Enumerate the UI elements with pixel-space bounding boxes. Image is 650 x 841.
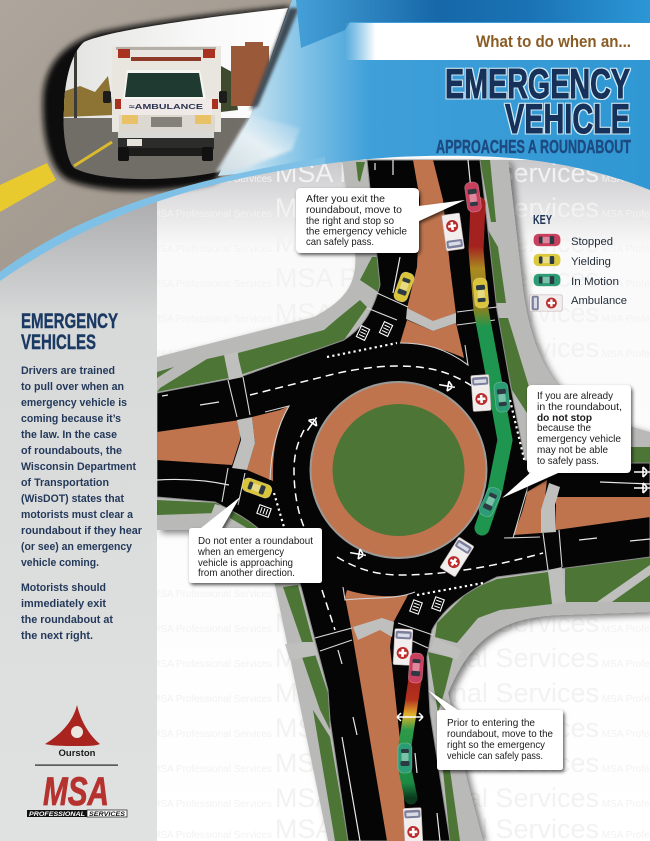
roundabout map xyxy=(157,160,650,841)
car: stopped north xyxy=(464,181,482,213)
sidebar heading: VEHICLES xyxy=(21,330,96,354)
key: ambulance: Ambulance xyxy=(571,295,627,307)
sidebar body text: of roundabouts, the xyxy=(21,445,122,457)
callout: if you are already: emergency vehicle xyxy=(537,433,621,445)
yield arrows south xyxy=(397,713,423,721)
sidebar body text: motorists must clear a xyxy=(21,509,134,521)
car: yielding north xyxy=(473,277,489,309)
sidebar body text: (WisDOT) states that xyxy=(21,493,124,505)
mirror reflection xyxy=(64,8,288,180)
ambulance: roundabout east xyxy=(471,374,491,412)
car: in motion south xyxy=(398,743,412,773)
sidebar heading xyxy=(21,309,118,354)
sidebar body text: emergency vehicle is xyxy=(21,397,127,409)
header photo: road surface xyxy=(0,0,300,272)
reflected yellow line xyxy=(74,142,112,166)
vehicle path: south approach xyxy=(405,672,416,798)
callout: if you are already xyxy=(502,385,631,498)
logo: MSA Professional Services: SERVICES xyxy=(89,812,125,818)
sidebar body text: to pull over when an xyxy=(21,381,124,393)
logo: Ourston: Ourston xyxy=(59,748,96,759)
callout: do not enter: from another direction. xyxy=(198,567,295,579)
callout: after you exit: can safely pass. xyxy=(306,236,374,248)
key: stopped: Stopped xyxy=(571,236,613,248)
sidewalk footprint xyxy=(157,160,650,841)
sidebar body text: immediately exit xyxy=(21,598,106,610)
car: in motion lower xyxy=(478,487,502,517)
key legend xyxy=(530,213,627,311)
key: in motion: In Motion xyxy=(571,276,619,288)
reflected road xyxy=(64,118,250,180)
callout: do not enter: when an emergency xyxy=(197,546,285,558)
callout: do not enter: Do not enter a roundabout xyxy=(198,535,313,547)
MSA wordmark: MSA xyxy=(43,770,109,814)
logo: Ourston xyxy=(45,705,100,759)
callout: do not enter xyxy=(189,497,322,583)
professional services bar xyxy=(27,810,87,817)
sidebar body text: of Transportation xyxy=(21,477,109,489)
sidebar body text: coming because it’s xyxy=(21,413,121,425)
logo: MSA Professional Services xyxy=(27,770,127,818)
road arrows and bike markings xyxy=(257,322,650,614)
splitter island: west xyxy=(157,406,289,481)
vehicle path: north approach xyxy=(476,204,505,528)
callout: if you are already: do not stop xyxy=(537,412,592,424)
callout: prior to entering xyxy=(428,690,563,770)
sidebar body text: Wisconsin Department xyxy=(21,461,136,473)
ambulance: south lower xyxy=(403,808,423,841)
asphalt roads xyxy=(157,160,650,841)
callout: if you are already: because the xyxy=(537,422,591,434)
sidebar body text: (or see) an emergency xyxy=(21,541,133,553)
callout: prior to entering: roundabout, move to the xyxy=(447,728,553,740)
callout: if you are already: may not be able xyxy=(537,444,608,456)
splitter island: north xyxy=(400,160,464,358)
ambulance: north xyxy=(442,213,464,251)
lamp post xyxy=(74,48,77,118)
watermark pattern xyxy=(152,158,650,841)
header: window frame xyxy=(250,8,299,110)
ambulance: roundabout south xyxy=(440,537,474,577)
splitter island: south xyxy=(345,590,408,841)
green landscaping xyxy=(157,160,650,841)
car: yielding west xyxy=(242,478,272,498)
pedestrian crossing strips xyxy=(205,352,650,660)
sidebar body text xyxy=(21,365,143,642)
header: white banner xyxy=(345,23,650,60)
crosswalk lines xyxy=(222,293,562,651)
sidebar body text: vehicle coming. xyxy=(21,557,99,569)
island edge lines xyxy=(265,343,540,600)
lane solid lines xyxy=(157,160,650,841)
logo: MSA Professional Services: PROFESSIONAL xyxy=(29,812,85,818)
sidebar body text: the law. In the case xyxy=(21,429,117,441)
sidebar body text: Drivers are trained xyxy=(21,365,115,377)
header: blue swoosh tail xyxy=(0,157,325,281)
sidebar body text: Motorists should xyxy=(21,582,106,594)
sidebar heading: EMERGENCY xyxy=(21,309,118,333)
banner text: What to do when an... xyxy=(476,32,631,51)
callout: after you exit: After you exit the xyxy=(306,193,385,205)
callout: prior to entering: Prior to entering the xyxy=(447,717,535,729)
callout: prior to entering: vehicle can safely pass. xyxy=(447,750,543,762)
callout: if you are already: If you are already xyxy=(537,390,614,402)
key: yielding: Yielding xyxy=(571,256,611,268)
car: in motion upper xyxy=(493,381,511,413)
ambulance: south upper xyxy=(393,629,413,665)
left grey sidebar background xyxy=(0,190,157,841)
header: dark blue top band xyxy=(296,0,650,48)
header photo: mirror casing xyxy=(43,6,290,191)
header: car door xyxy=(216,115,300,172)
callout: after you exit: the right and stop so xyxy=(306,215,394,227)
sky xyxy=(64,8,288,125)
main title xyxy=(445,60,630,142)
map area background xyxy=(157,160,650,841)
splitter island: east xyxy=(513,480,650,535)
callout: after you exit: the emergency vehicle xyxy=(306,226,407,238)
callout: after you exit: roundabout, move to xyxy=(306,204,402,216)
header: blue backdrop xyxy=(218,0,650,190)
car: stopped south xyxy=(408,653,424,683)
lane dashes xyxy=(250,365,544,630)
brick building xyxy=(231,42,269,106)
tree line xyxy=(62,76,114,117)
sidebar body text: the next right. xyxy=(21,630,93,642)
callout: do not enter: vehicle is approaching xyxy=(198,557,293,569)
key heading: KEY xyxy=(533,213,552,227)
sidebar body text: the roundabout at xyxy=(21,614,113,626)
sidebar body text: roundabout if they hear xyxy=(21,525,143,537)
ambulance lettering: ≈AMBULANCE xyxy=(129,104,203,111)
logo divider xyxy=(35,764,118,766)
trees right of ambulance xyxy=(221,66,238,112)
callout: prior to entering: right so the emergency xyxy=(447,739,546,751)
ambulance front xyxy=(103,46,227,161)
header photo: yellow road line xyxy=(0,163,56,212)
central island xyxy=(310,382,486,558)
car: yielding north-west xyxy=(394,272,414,302)
yield dotted lines xyxy=(274,343,525,595)
callout: if you are already: in the roundabout, xyxy=(537,401,622,413)
callout: after you exit xyxy=(296,188,465,253)
callout: if you are already: to safely pass. xyxy=(537,455,599,467)
